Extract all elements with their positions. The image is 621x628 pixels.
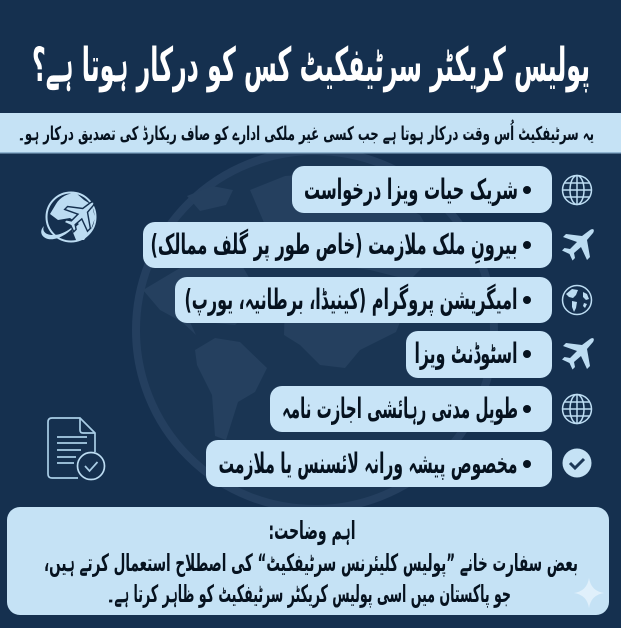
sparkle: [574, 578, 604, 608]
globe watermark: [136, 151, 494, 509]
list item: student visa: [406, 331, 552, 378]
subtitle band: [0, 113, 621, 154]
list item: overseas employment: [143, 222, 552, 268]
icon: wire globe: [562, 394, 592, 424]
icon: globe with plane: [41, 192, 96, 242]
icon: plane: [562, 229, 594, 260]
icon: plane: [562, 338, 594, 370]
icon: wire globe: [562, 176, 592, 204]
icon: check badge: [562, 448, 592, 478]
icon: document with check: [48, 418, 104, 480]
note panel: [7, 507, 609, 615]
icon: earth globe: [562, 286, 592, 314]
list item: professional licence: [206, 440, 552, 487]
note heading: اہم وضاحت:: [268, 516, 356, 546]
list item: student visa: اسٹوڈنٹ ویزا: [414, 337, 518, 370]
list item: long term residence: [270, 386, 552, 432]
list item: spouse visa: [292, 166, 552, 213]
list item: immigration program: [175, 277, 552, 323]
